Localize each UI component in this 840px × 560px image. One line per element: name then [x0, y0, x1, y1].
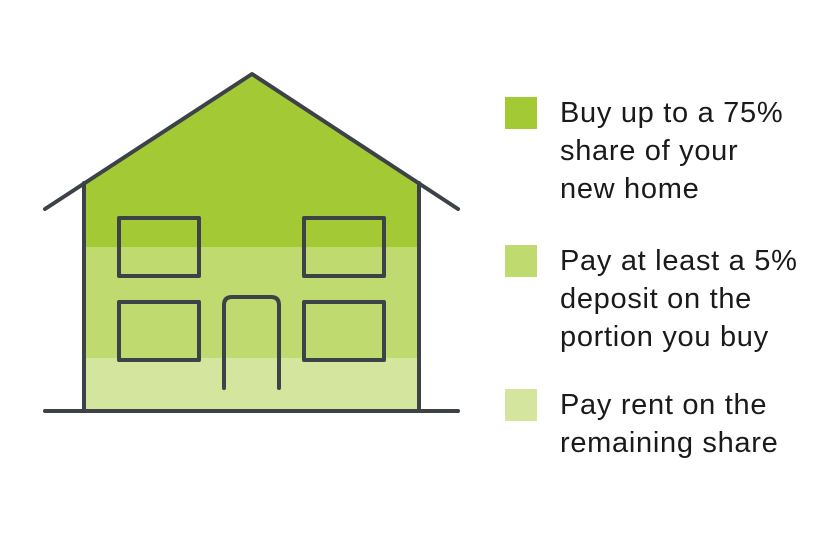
text 1: share of your	[560, 135, 738, 167]
text 2: deposit on the	[560, 283, 752, 315]
text 1	[560, 97, 783, 205]
legend item 2	[505, 245, 798, 353]
legend item 3	[505, 389, 778, 459]
text 3	[560, 389, 778, 459]
text 2: portion you buy	[560, 321, 769, 353]
legend item 1	[505, 97, 783, 205]
swatch mid	[505, 245, 537, 277]
swatch light	[505, 389, 537, 421]
house outline	[45, 74, 458, 411]
text 2	[560, 245, 798, 353]
house fill: mid band	[84, 247, 419, 358]
swatch dark	[505, 97, 537, 129]
house fill: light band	[84, 358, 419, 411]
text 1: Buy up to a 75%	[560, 97, 783, 129]
text 2: Pay at least a 5%	[560, 245, 798, 277]
house fill: dark band	[84, 74, 419, 247]
text 1: new home	[560, 173, 699, 205]
text 3: Pay rent on the	[560, 389, 767, 421]
text 3: remaining share	[560, 427, 778, 459]
